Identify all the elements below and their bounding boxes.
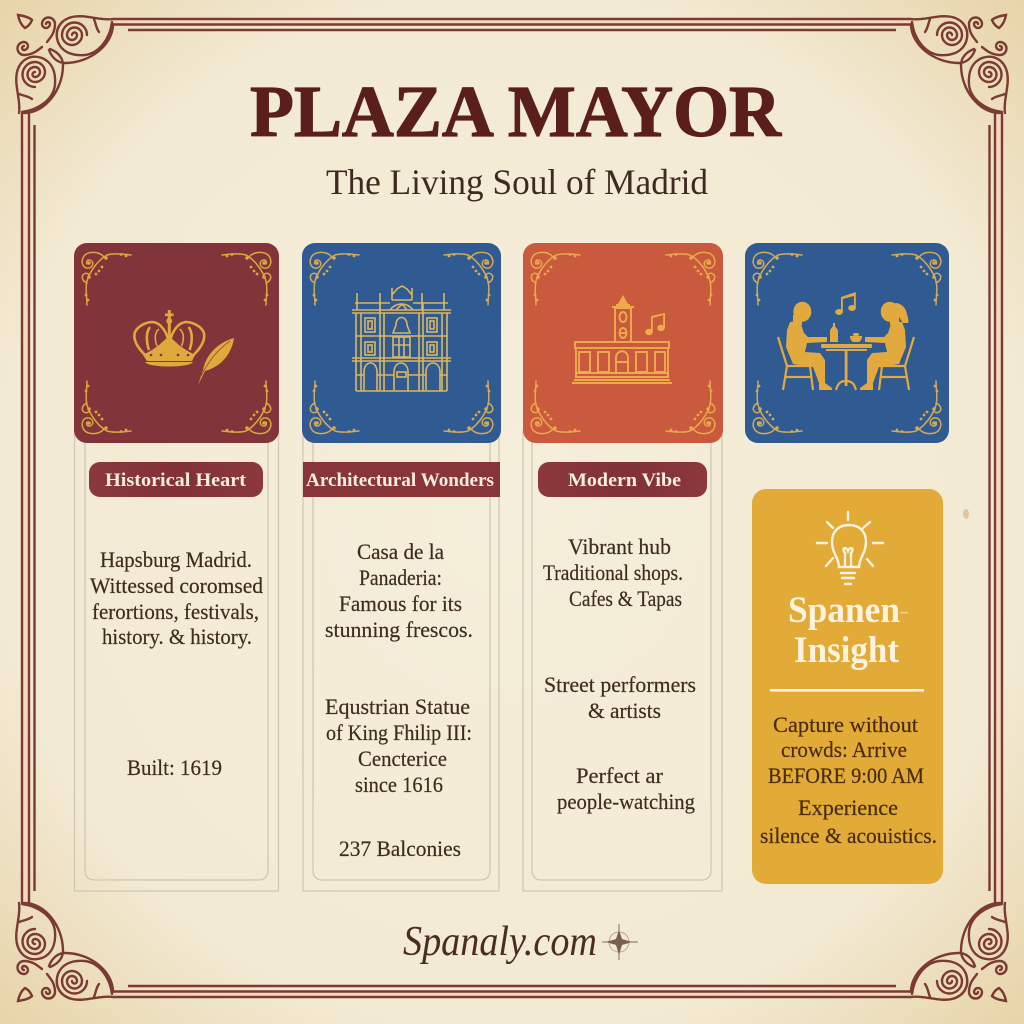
panel: insight callout xyxy=(752,489,943,884)
insight heading xyxy=(788,590,908,671)
body text xyxy=(90,547,263,780)
column frame 3 xyxy=(523,430,722,891)
body text: people-watching xyxy=(557,789,695,814)
body text: Vibrant hub xyxy=(568,534,671,559)
body text: Hapsburg Madrid. xyxy=(100,547,252,572)
insight heading: Insight xyxy=(794,630,900,671)
insight text xyxy=(760,712,937,848)
body text: Cafes & Tapas xyxy=(569,586,682,611)
body text xyxy=(325,539,473,861)
heading pill xyxy=(89,462,263,497)
body text: Panaderia: xyxy=(359,565,442,590)
body text: of King Fhilip III: xyxy=(326,720,472,745)
subtitle: The Living Soul of Madrid xyxy=(326,162,708,202)
body text: Perfect ar xyxy=(576,763,664,788)
panel: architectural wonders xyxy=(302,243,501,891)
body text: 237 Balconies xyxy=(339,836,461,861)
body text: Equstrian Statue xyxy=(325,694,470,719)
panel: historical heart xyxy=(74,243,279,891)
insight text: crowds: Arrive xyxy=(781,737,907,762)
heading banner: Architectural Wonders xyxy=(306,470,494,491)
insight text: BEFORE 9:00 AM xyxy=(768,763,924,788)
column frame 1 xyxy=(74,430,278,891)
footer brand: Spanaly.com xyxy=(403,919,597,965)
icon tile: cafe couple with music xyxy=(745,243,949,443)
body text: Wittessed coromsed xyxy=(90,573,263,598)
icon: light bulb xyxy=(817,512,883,584)
insight text: silence & acouistics. xyxy=(760,823,937,848)
column frame 2 xyxy=(303,430,499,891)
heading banner xyxy=(303,462,500,497)
insight text: Experience xyxy=(798,795,898,820)
heading pill xyxy=(538,462,707,497)
title: PLAZA MAYOR xyxy=(250,71,782,152)
paper blemish xyxy=(963,509,969,519)
icon tile: clock tower and music note xyxy=(523,243,723,443)
body text: Street performers xyxy=(544,672,696,697)
body text: history. & history. xyxy=(102,624,252,649)
body text xyxy=(543,534,696,814)
body text: ferortions, festivals, xyxy=(92,599,259,624)
icon tile: crown and quill xyxy=(74,243,279,443)
insight heading: Spanen xyxy=(788,590,900,631)
heading pill: Historical Heart xyxy=(105,470,247,491)
body text: Cencterice xyxy=(358,746,447,771)
body text: Built: 1619 xyxy=(127,755,222,780)
icon tile: palace facade xyxy=(302,243,501,443)
body text: Traditional shops. xyxy=(543,560,683,585)
body text: stunning frescos. xyxy=(325,617,473,642)
heading pill: Modern Vibe xyxy=(568,470,681,491)
panel: modern vibe xyxy=(523,243,723,891)
insight text: Capture without xyxy=(773,712,918,737)
body text: Casa de la xyxy=(357,539,444,564)
body text: Famous for its xyxy=(339,591,462,616)
body text: & artists xyxy=(588,698,661,723)
icon: compass rose xyxy=(602,924,638,960)
body text: since 1616 xyxy=(355,772,443,797)
